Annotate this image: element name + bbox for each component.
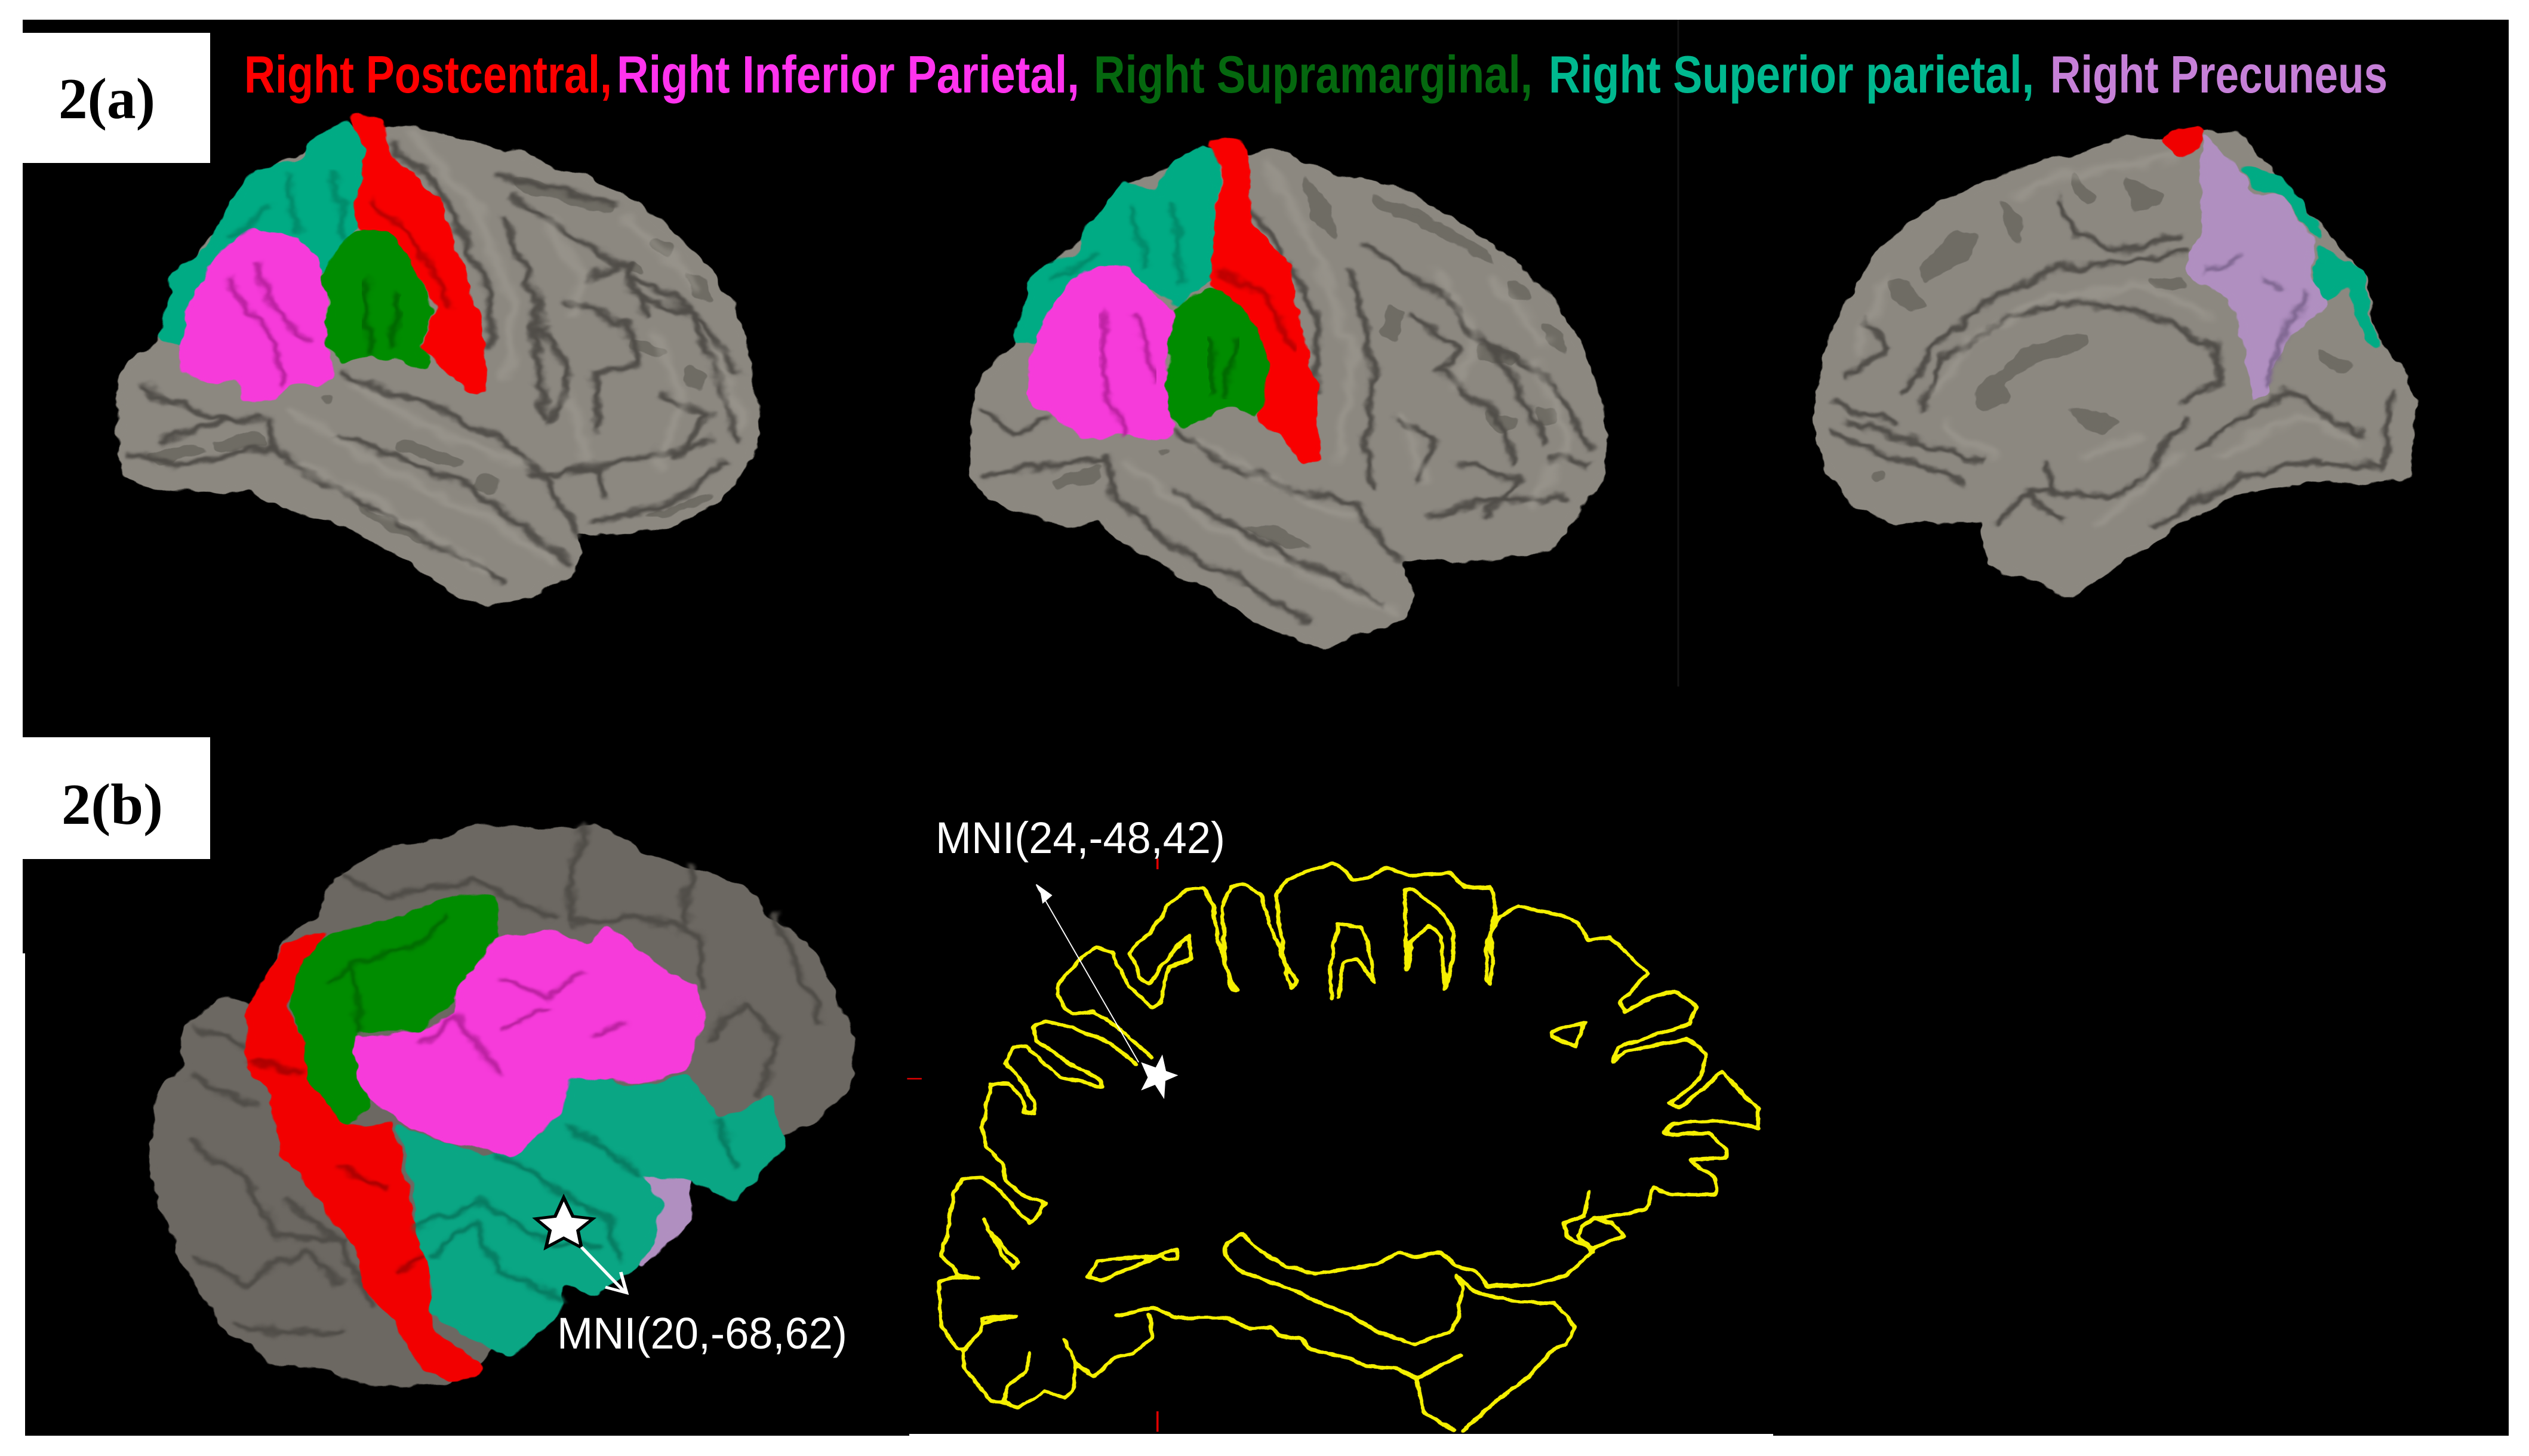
brain: lateral view 1 bbox=[116, 115, 759, 610]
region: postcentral bbox=[1207, 137, 1322, 464]
brain: medial view bbox=[1816, 125, 2416, 598]
label: 2(b): 2(b) bbox=[61, 772, 163, 837]
arrow: to MNI label bbox=[582, 1247, 626, 1293]
legend: region names bbox=[244, 45, 2388, 104]
region: supramarginal bbox=[317, 227, 434, 370]
region: postcentral bbox=[346, 115, 490, 396]
icon: star marker bbox=[1141, 1054, 1178, 1099]
region: superior parietal bbox=[397, 1070, 787, 1358]
annotation: MNI 20,-68,62: MNI(20,-68,62) bbox=[557, 1309, 847, 1358]
region: inferior parietal bbox=[177, 227, 334, 403]
arrow: to MNI label bbox=[1036, 885, 1139, 1062]
region: superior parietal bbox=[1014, 144, 1222, 344]
annotation: MNI 24,-48,42: MNI(24,-48,42) bbox=[936, 813, 1225, 863]
brain: lateral view 2 bbox=[970, 137, 1607, 648]
yellow contour bbox=[939, 863, 1758, 1431]
legend: region names: Right Superior parietal, bbox=[1549, 45, 2034, 104]
icon: star marker bbox=[536, 1198, 593, 1248]
brain: posterior view bbox=[151, 824, 856, 1386]
label: 2(b) bbox=[23, 737, 210, 859]
sagittal outline slice bbox=[907, 858, 1758, 1432]
region: superior parietal bbox=[2202, 131, 2380, 350]
legend: region names: Right Precuneus bbox=[2050, 45, 2388, 104]
legend: region names: Right Supramarginal, bbox=[1094, 45, 1533, 104]
region: inferior parietal bbox=[1024, 265, 1176, 440]
region: supramarginal bbox=[1157, 287, 1269, 431]
label: 2(a): 2(a) bbox=[59, 67, 155, 131]
region: supramarginal bbox=[288, 893, 500, 1129]
region: precuneus bbox=[2187, 134, 2329, 403]
label: 2(a) bbox=[23, 33, 210, 163]
crosshair ticks bbox=[907, 858, 1158, 1432]
legend: region names: Right Postcentral, bbox=[244, 45, 612, 104]
region: postcentral bbox=[2160, 125, 2204, 155]
legend: region names: Right Inferior Parietal, bbox=[617, 45, 1079, 104]
region: superior parietal bbox=[160, 119, 365, 346]
region: precuneus bbox=[557, 1150, 696, 1289]
region: postcentral bbox=[245, 929, 485, 1384]
region: inferior parietal bbox=[354, 926, 703, 1155]
